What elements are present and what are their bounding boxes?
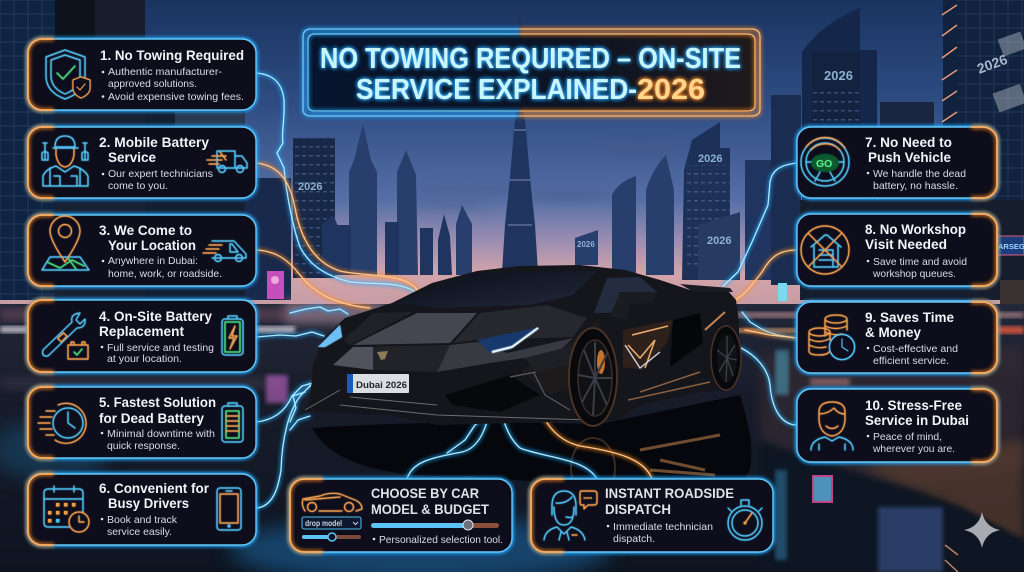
icon: workshop crossed out bbox=[801, 226, 849, 274]
heading: 3. We Come to bbox=[99, 222, 192, 238]
background: Dubai skyline: 2026 bbox=[824, 68, 853, 83]
logo bbox=[377, 351, 388, 360]
heading bbox=[99, 308, 212, 339]
heading bbox=[99, 394, 216, 426]
heading: 1. No Towing Required bbox=[100, 47, 244, 63]
background: dusk sky bbox=[0, 0, 1024, 304]
electric arcs from panels to car: cyan bbox=[256, 73, 797, 508]
background: Dubai skyline bbox=[293, 8, 944, 300]
panel 9: saves time and money bbox=[797, 302, 997, 373]
heading: Visit Needed bbox=[865, 236, 947, 252]
rear wing bbox=[680, 284, 733, 292]
bullets bbox=[102, 255, 222, 280]
panel 1: no towing required bbox=[28, 39, 256, 110]
background: Dubai skyline: 2026 bbox=[577, 240, 595, 249]
panel 7: no need to push vehicle bbox=[797, 127, 997, 198]
background: foreground towers bbox=[0, 0, 1024, 310]
icon: technician bbox=[42, 136, 88, 186]
icon: stopwatch bbox=[728, 500, 762, 540]
bullets bbox=[102, 168, 213, 192]
heading: 6. Convenient for bbox=[99, 480, 210, 496]
icon: shield with check bbox=[46, 50, 90, 99]
bullets: Anywhere in Dubai: bbox=[108, 255, 198, 267]
heading: Push Vehicle bbox=[868, 149, 951, 165]
bullets: We handle the dead bbox=[873, 168, 966, 180]
panel 10: stress-free service bbox=[797, 389, 997, 462]
panel 2: mobile battery service bbox=[28, 127, 256, 198]
bullets: Avoid expensive towing fees. bbox=[108, 91, 244, 103]
banner heading line two: 2026 bbox=[637, 74, 705, 106]
bullets bbox=[102, 66, 244, 103]
side window bbox=[594, 277, 657, 313]
icon: van bbox=[203, 241, 246, 262]
bullets: quick response. bbox=[107, 440, 180, 452]
bullets: come to you. bbox=[108, 180, 168, 192]
heading: 4. On-Site Battery bbox=[99, 308, 212, 324]
banner heading line two: SERVICE EXPLAINED- bbox=[356, 74, 637, 106]
bullets: efficient service. bbox=[873, 355, 949, 367]
bullets: at your location. bbox=[107, 353, 182, 365]
heading: 5. Fastest Solution bbox=[99, 394, 216, 410]
electric arcs from panels to car: orange bbox=[256, 163, 797, 479]
front wheel bbox=[569, 328, 617, 426]
signs bbox=[267, 236, 1024, 301]
bullets: Authentic manufacturer- bbox=[108, 66, 223, 78]
mirror bbox=[610, 292, 657, 320]
front bumper bbox=[305, 345, 590, 420]
icon: car outline bbox=[302, 493, 362, 512]
bullets: Our expert technicians bbox=[108, 168, 213, 180]
title banner bbox=[303, 29, 760, 116]
heading: 7. No Need to bbox=[865, 134, 952, 150]
heading bbox=[605, 485, 734, 517]
icon: map pin bbox=[42, 216, 89, 270]
panel: choose by car model and budget bbox=[290, 479, 512, 552]
heading: MODEL & BUDGET bbox=[371, 501, 489, 517]
icon: coins and clock bbox=[809, 315, 854, 360]
bullets: home, work, or roadside. bbox=[108, 268, 222, 280]
panel 8: no workshop visit needed bbox=[797, 214, 997, 286]
heading: for Dead Battery bbox=[99, 410, 204, 426]
bullets: battery, no hassle. bbox=[873, 180, 958, 192]
heading bbox=[99, 222, 196, 253]
heading: DISPATCH bbox=[605, 501, 671, 517]
side intake and orange reflections bbox=[623, 312, 725, 400]
road light streaks and reflections bbox=[0, 300, 1024, 572]
panel 4: on-site battery replacement bbox=[28, 300, 256, 372]
bullets bbox=[101, 342, 214, 365]
background: foreground towers: 2026 bbox=[975, 51, 1010, 77]
bullets: Peace of mind, bbox=[873, 431, 942, 443]
heading: INSTANT ROADSIDE bbox=[605, 485, 734, 501]
bullets bbox=[867, 343, 958, 367]
bullets: Minimal downtime with bbox=[107, 428, 215, 440]
panel 6: convenient for busy drivers bbox=[28, 474, 256, 545]
heading bbox=[99, 480, 210, 511]
heading: 10. Stress-Free bbox=[865, 397, 962, 413]
heading bbox=[371, 485, 489, 517]
watermark sparkle bbox=[964, 512, 1000, 548]
background: Dubai skyline: 2026 bbox=[707, 235, 731, 247]
windshield bbox=[397, 271, 597, 308]
heading: Your Location bbox=[108, 237, 196, 253]
bullets bbox=[867, 431, 955, 455]
heading: 9. Saves Time bbox=[865, 309, 954, 325]
budget slider bbox=[371, 520, 499, 530]
icon: smiling person bbox=[811, 402, 853, 450]
bullets: wherever you are. bbox=[872, 443, 955, 455]
icon: full battery bbox=[222, 403, 243, 442]
icon: service truck bbox=[207, 151, 247, 172]
background: Dubai skyline: 2026 bbox=[298, 181, 322, 193]
icon: calendar with clock bbox=[44, 486, 89, 532]
dropdown: drop model bbox=[305, 519, 342, 528]
rear wheel bbox=[711, 326, 741, 390]
car body bbox=[304, 265, 739, 425]
heading bbox=[99, 134, 209, 165]
bullets: Cost-effective and bbox=[873, 343, 958, 355]
background: clouds bbox=[410, 146, 690, 208]
heading: & Money bbox=[865, 324, 921, 340]
heading bbox=[865, 309, 954, 340]
icon: support agent bbox=[544, 491, 597, 540]
bullets: Full service and testing bbox=[107, 342, 214, 354]
hood facets bbox=[333, 305, 600, 395]
icon: steering wheel with GO bbox=[801, 137, 849, 186]
bullets bbox=[867, 256, 967, 280]
bullets bbox=[101, 428, 215, 452]
bullets: service easily. bbox=[107, 526, 172, 538]
icon: wrench and battery bbox=[43, 313, 88, 359]
heading: Busy Drivers bbox=[108, 495, 189, 511]
heading bbox=[865, 397, 969, 428]
small slider bbox=[302, 533, 361, 541]
icon: steering wheel with GO: GO bbox=[816, 158, 832, 170]
panel 3: we come to your location bbox=[28, 215, 256, 286]
bullets: Book and track bbox=[107, 514, 178, 526]
bullets: approved solutions. bbox=[108, 78, 197, 90]
dropdown bbox=[302, 517, 361, 529]
bullet: dispatch. bbox=[613, 533, 655, 545]
heading bbox=[865, 221, 966, 252]
icon: phone bbox=[217, 488, 241, 530]
licence plate: Dubai 2026 bbox=[356, 380, 407, 391]
bullets: Save time and avoid bbox=[873, 256, 967, 268]
panel: instant roadside dispatch bbox=[531, 479, 773, 552]
heading: Replacement bbox=[99, 323, 184, 339]
licence plate bbox=[347, 374, 409, 393]
background: Dubai skyline: 2026 bbox=[698, 153, 722, 165]
heading: 8. No Workshop bbox=[865, 221, 966, 237]
icon: charging battery bbox=[222, 316, 243, 355]
heading: CHOOSE BY CAR bbox=[371, 485, 479, 501]
wet road bbox=[0, 304, 1024, 572]
car reflection on wet road bbox=[312, 395, 751, 498]
banner frame bbox=[303, 29, 760, 116]
heading bbox=[865, 134, 952, 165]
bullet bbox=[607, 521, 713, 545]
bullets bbox=[867, 168, 966, 192]
bullet: Immediate technician bbox=[613, 521, 713, 533]
sports car bbox=[304, 265, 741, 426]
headlights bbox=[318, 325, 540, 353]
banner heading: NO TOWING REQUIRED – ON-SITE bbox=[320, 43, 741, 75]
icon: fast clock bbox=[38, 403, 86, 443]
panel 5: fastest solution bbox=[28, 387, 256, 458]
heading: 2. Mobile Battery bbox=[99, 134, 209, 150]
bullets: workshop queues. bbox=[872, 268, 956, 280]
bullet: Personalized selection tool. bbox=[379, 534, 503, 546]
heading: Service in Dubai bbox=[865, 412, 969, 428]
heading: Service bbox=[108, 149, 156, 165]
bullets bbox=[101, 514, 178, 538]
